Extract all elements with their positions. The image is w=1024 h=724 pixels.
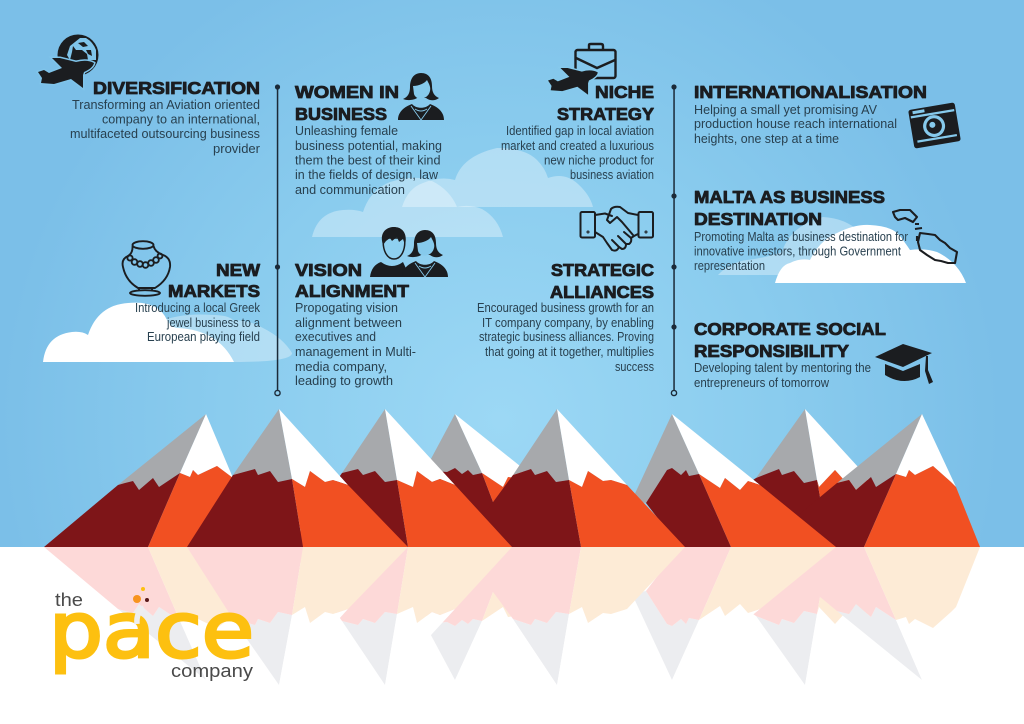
icon: handshake bbox=[580, 207, 653, 251]
block: women in business: WOMEN IN bbox=[295, 82, 399, 102]
block: strategic alliances: that going at it together, multiplies bbox=[485, 345, 654, 359]
logo: the pace company: pace bbox=[49, 587, 254, 676]
block: niche strategy: market and created a luxurious bbox=[501, 139, 654, 153]
block: women in business: in the fields of design, law bbox=[295, 168, 439, 182]
block: internationalisation: heights, one step at a time bbox=[694, 132, 839, 146]
block: strategic alliances: IT company company, by enabling bbox=[482, 316, 654, 330]
block: niche strategy: Identified gap in local aviation bbox=[506, 124, 654, 138]
block: new markets: NEW bbox=[216, 260, 261, 280]
block: new markets: jewel business to a bbox=[166, 316, 260, 330]
block: corporate social responsibility bbox=[694, 319, 886, 390]
logo: the pace company: company bbox=[171, 661, 253, 681]
block: strategic alliances: ALLIANCES bbox=[550, 282, 654, 302]
mountains bbox=[44, 409, 980, 547]
block: strategic alliances: Encouraged business growth for an bbox=[477, 301, 654, 315]
block: internationalisation: Helping a small yet promising AV bbox=[694, 103, 878, 117]
block: malta as business destination: Promoting Malta as business destination for bbox=[694, 230, 908, 244]
block: diversification: Transforming an Aviation oriented bbox=[72, 98, 260, 112]
block: corporate social responsibility: entrepreneurs of tomorrow bbox=[694, 376, 830, 390]
water foreground bbox=[0, 547, 1024, 724]
block: malta as business destination bbox=[694, 187, 908, 273]
icon: camera bbox=[908, 102, 961, 149]
icon: graduation cap bbox=[875, 344, 933, 384]
block: strategic alliances: STRATEGIC bbox=[551, 260, 654, 280]
block: vision alignment bbox=[295, 260, 416, 388]
icon: map of Malta bbox=[893, 210, 957, 263]
block: new markets bbox=[135, 260, 261, 344]
block: vision alignment: executives and bbox=[295, 330, 376, 344]
block: internationalisation bbox=[694, 82, 927, 146]
block: niche strategy: STRATEGY bbox=[557, 104, 654, 124]
block: malta as business destination: innovative investors, through Government bbox=[694, 244, 901, 258]
block: internationalisation: production house reach international bbox=[694, 117, 897, 131]
block: niche strategy: new niche product for bbox=[544, 154, 654, 168]
block: corporate social responsibility: CORPORATE SOCIAL bbox=[694, 319, 886, 339]
block: niche strategy bbox=[501, 82, 654, 182]
block: new markets: MARKETS bbox=[168, 281, 260, 301]
block: strategic alliances: strategic business alliances. Proving bbox=[479, 330, 654, 344]
block: diversification: multifaceted outsourcing business bbox=[70, 127, 260, 141]
block: diversification: company to an international, bbox=[102, 112, 260, 126]
block: vision alignment: Propogating vision bbox=[295, 301, 398, 315]
timeline: right bbox=[671, 84, 677, 396]
block: vision alignment: ALIGNMENT bbox=[295, 281, 409, 301]
cloud: middle clouds bbox=[312, 148, 593, 237]
icon: necklace on bust bbox=[123, 241, 170, 296]
cloud: right cloud pair bbox=[718, 217, 966, 283]
block: diversification: provider bbox=[213, 142, 260, 156]
block: vision alignment: leading to growth bbox=[295, 374, 393, 388]
logo: the pace company: the bbox=[55, 590, 83, 610]
block: women in business bbox=[295, 82, 442, 197]
block: vision alignment: VISION bbox=[295, 260, 362, 280]
block: women in business: BUSINESS bbox=[295, 104, 387, 124]
block: vision alignment: media company, bbox=[295, 360, 387, 374]
cloud: left cloud pair bbox=[43, 303, 292, 362]
block: corporate social responsibility: RESPONSIBILITY bbox=[694, 341, 849, 361]
icon: woman bbox=[398, 73, 444, 120]
block: new markets: Introducing a local Greek bbox=[135, 301, 261, 315]
block: corporate social responsibility: Developing talent by mentoring the bbox=[694, 361, 871, 375]
block: vision alignment: management in Multi- bbox=[295, 345, 416, 359]
block: internationalisation: INTERNATIONALISATION bbox=[694, 82, 927, 102]
icon: man and woman bbox=[370, 227, 448, 277]
block: malta as business destination: MALTA AS BUSINESS bbox=[694, 187, 885, 207]
block: niche strategy: NICHE bbox=[595, 82, 654, 102]
block: women in business: them the best of their kind bbox=[295, 154, 441, 168]
block: strategic alliances: success bbox=[615, 360, 654, 374]
block: malta as business destination: DESTINATION bbox=[694, 209, 822, 229]
block: women in business: Unleashing female bbox=[295, 124, 398, 138]
block: strategic alliances bbox=[477, 260, 654, 374]
block: malta as business destination: representation bbox=[694, 259, 765, 273]
icon: globe and plane bbox=[38, 34, 98, 88]
block: niche strategy: business aviation bbox=[570, 168, 654, 182]
mountain reflection bbox=[44, 547, 980, 685]
block: new markets: European playing field bbox=[147, 330, 260, 344]
block: diversification bbox=[70, 78, 260, 156]
timeline: left bbox=[275, 84, 280, 396]
block: diversification: DIVERSIFICATION bbox=[93, 78, 260, 98]
block: women in business: business potential, making bbox=[295, 139, 442, 153]
block: women in business: and communication bbox=[295, 183, 405, 197]
icon: briefcase and plane bbox=[548, 44, 616, 95]
block: vision alignment: alignment between bbox=[295, 316, 402, 330]
sky background bbox=[0, 0, 1024, 548]
